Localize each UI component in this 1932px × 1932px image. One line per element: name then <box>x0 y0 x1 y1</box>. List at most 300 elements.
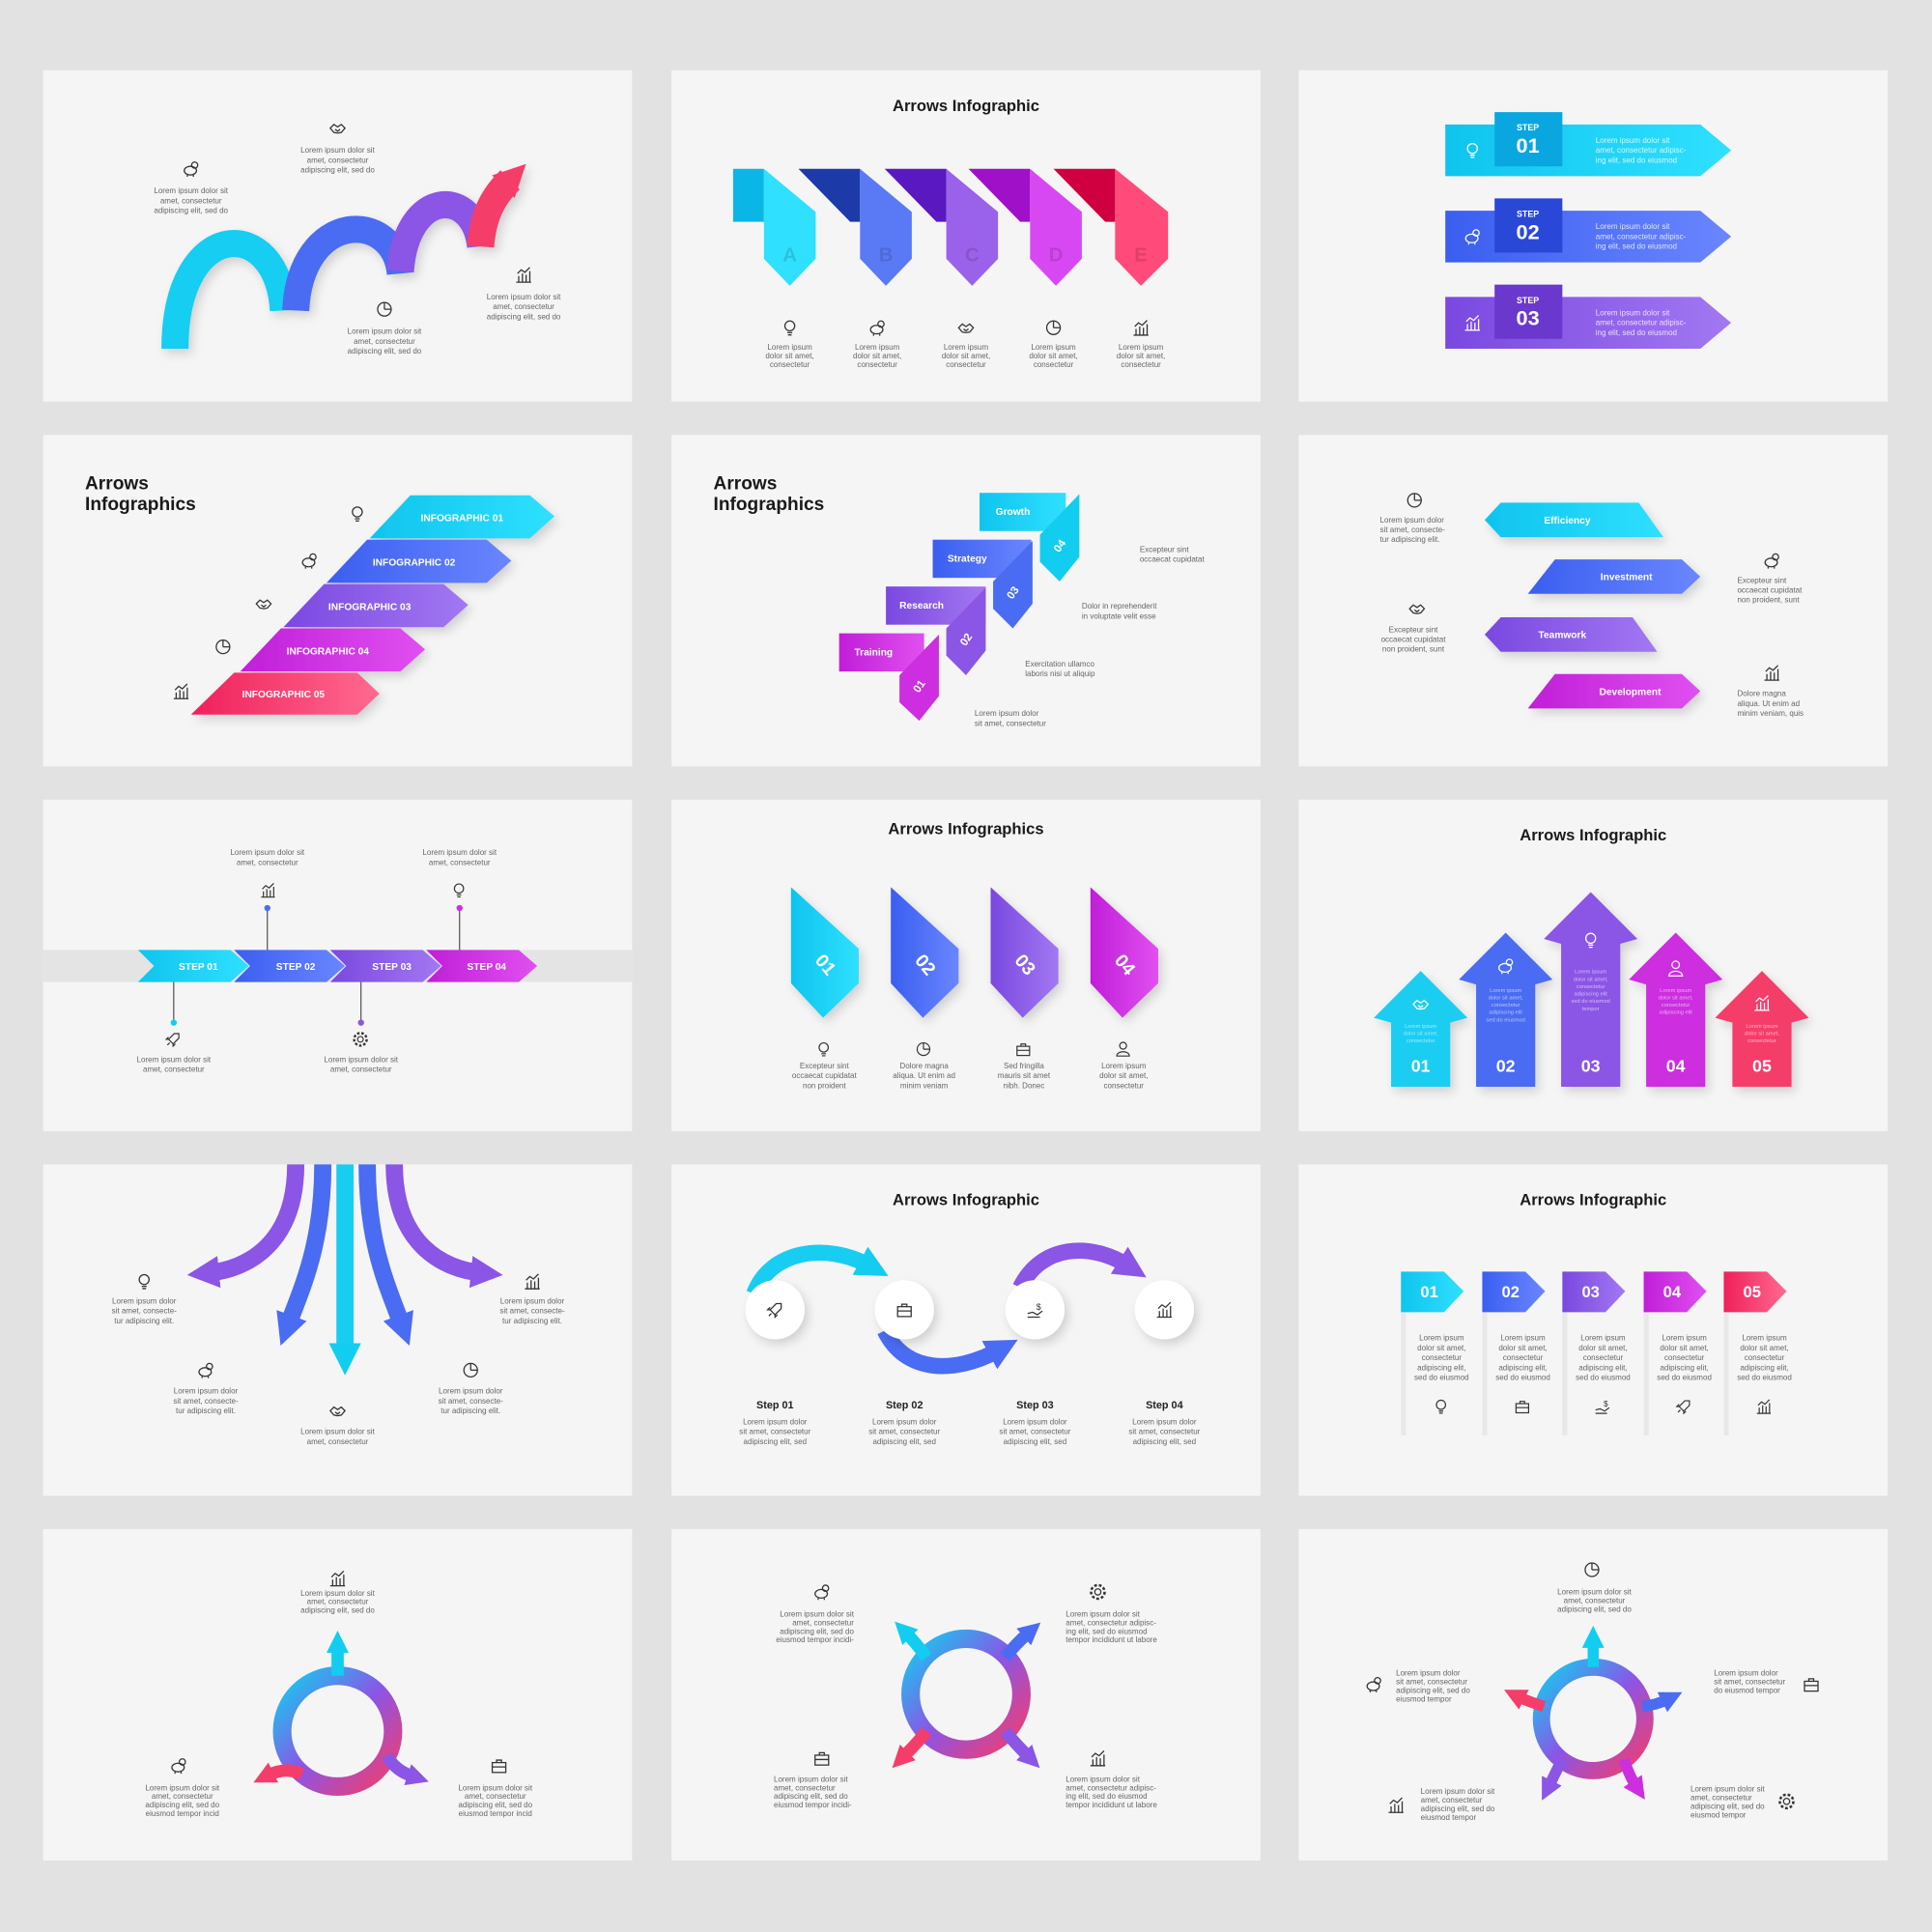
step 03: amet, consectetur adipisc- <box>1596 319 1687 327</box>
pin icons and texts: amet, consectetur <box>237 858 298 867</box>
icons and captions: occaecat cupidatat <box>792 1071 858 1080</box>
ribbons: A <box>782 244 797 266</box>
text: item 3: amet, consectetur <box>354 337 415 346</box>
step captions: Step 01 <box>756 1400 794 1411</box>
small texts: consectetur <box>1747 1038 1776 1044</box>
icons and captions: dolor sit amet, <box>1117 352 1165 360</box>
icon: piggy <box>185 162 198 177</box>
texts: adipiscing elit, sed do <box>1421 1804 1495 1813</box>
texts: adipiscing elit, sed do <box>458 1801 533 1809</box>
side texts: occaecat cupidatat <box>1381 636 1446 644</box>
step 02: amet, consectetur adipisc- <box>1596 232 1687 241</box>
small texts: sed do eiusmod <box>1486 1017 1525 1023</box>
texts: adipiscing elit, sed do <box>1557 1605 1632 1613</box>
texts: Lorem ipsum dolor <box>1396 1669 1461 1678</box>
fan texts: sit amet, consecte- <box>112 1307 177 1316</box>
panel: wave steps: adipiscing elit, sed <box>1133 1437 1196 1446</box>
side texts: sit amet, consecte- <box>1380 526 1445 534</box>
column texts: sed do eiusmod <box>1576 1374 1631 1382</box>
column texts: adipiscing elit, <box>1660 1363 1709 1372</box>
step 01: amet, consectetur adipisc- <box>1596 146 1687 155</box>
diagonal arrows: 03 <box>1006 584 1022 602</box>
icons and captions: Lorem ipsum <box>1119 343 1164 352</box>
pins <box>174 908 460 1023</box>
text: item 1: Lorem ipsum dolor sit <box>154 186 229 195</box>
texts: Lorem ipsum dolor sit <box>1065 1775 1141 1783</box>
title: Arrows Infographics <box>888 820 1044 838</box>
icons and captions: Excepteur sint <box>800 1062 849 1070</box>
texts: adipiscing elit, sed do <box>1396 1687 1470 1695</box>
fan texts: tur adipiscing elit. <box>502 1317 562 1325</box>
side texts <box>1380 494 1804 718</box>
column texts: consectetur <box>1745 1353 1785 1362</box>
small texts: consectetur <box>1406 1038 1435 1044</box>
side texts: Excepteur sint <box>1389 625 1438 634</box>
texts: Lorem ipsum dolor sit <box>1557 1588 1633 1597</box>
texts: Lorem ipsum dolor sit <box>1690 1785 1765 1794</box>
icon: pie <box>378 302 391 316</box>
panel: wave steps: adipiscing elit, sed <box>872 1437 936 1446</box>
panel: wave steps: adipiscing elit, sed <box>744 1437 807 1446</box>
title: Infographics <box>85 495 196 515</box>
panel: staircase: sit amet, consectetur <box>975 719 1046 727</box>
column texts: dolor sit amet, <box>1660 1344 1709 1352</box>
title: Arrows <box>85 473 149 494</box>
fan texts <box>112 1274 565 1446</box>
side texts: Dolore magna <box>1737 690 1786 698</box>
step 03: 03 <box>1517 306 1540 330</box>
text: item 2: Lorem ipsum dolor sit <box>300 146 376 155</box>
step 02: 02 <box>1517 219 1540 243</box>
captions: occaecat cupidatat <box>1140 555 1205 564</box>
texts <box>145 1571 533 1818</box>
step boxes: Research <box>899 601 944 611</box>
panel: staircase: Lorem ipsum dolor <box>975 709 1039 718</box>
column texts: Lorem ipsum <box>1662 1334 1707 1343</box>
side texts: Excepteur sint <box>1737 576 1787 584</box>
column heads: 01 <box>1420 1283 1438 1301</box>
text: item 4: adipiscing elit, sed do <box>487 312 561 321</box>
column texts: dolor sit amet, <box>1417 1344 1466 1352</box>
arrows <box>1485 502 1700 708</box>
chevrons: STEP 02 <box>276 962 316 973</box>
arrow labels: Efficiency <box>1544 516 1591 526</box>
icons and captions: consectetur <box>1104 1081 1144 1090</box>
side texts: occaecat cupidatat <box>1737 586 1803 595</box>
title: Arrows Infographic <box>1520 1190 1666 1208</box>
icons and captions: dolor sit amet, <box>1029 352 1078 360</box>
icons and captions: consectetur <box>1034 360 1074 369</box>
icons and captions: dolor sit amet, <box>765 352 814 360</box>
texts: eiusmod tempor <box>1421 1813 1476 1822</box>
texts: amet, consectetur adipisc- <box>1065 1783 1156 1792</box>
column texts: consectetur <box>1583 1353 1623 1362</box>
captions: Excepteur sint <box>1140 545 1189 554</box>
arrow labels: INFOGRAPHIC 04 <box>287 646 369 657</box>
panel: four named arrows <box>1298 435 1888 766</box>
arrows stack <box>191 496 554 715</box>
texts: amet, consectetur <box>1564 1596 1626 1605</box>
column texts: adipiscing elit, <box>1578 1363 1628 1372</box>
panel: wave steps: sit amet, consectetur <box>739 1428 811 1436</box>
icons and captions: Lorem ipsum <box>855 343 900 352</box>
column texts: consectetur <box>1503 1353 1544 1362</box>
text: item 4: Lorem ipsum dolor sit <box>487 293 561 301</box>
ring <box>1542 1667 1645 1771</box>
column texts: adipiscing elit, <box>1498 1363 1548 1372</box>
panel: bridge arches <box>43 71 632 402</box>
panel: four tilted pentagons: 03 <box>1010 951 1038 980</box>
texts: eiusmod tempor incid <box>146 1809 219 1818</box>
pin icons and texts: amet, consectetur <box>143 1065 205 1074</box>
fan texts: Lorem ipsum dolor <box>112 1296 177 1305</box>
panel: three steps <box>1298 71 1888 402</box>
texts <box>1367 1563 1818 1822</box>
icons and captions: nibh. Donec <box>1004 1081 1044 1090</box>
texts: tempor incididunt ut labore <box>1065 1801 1157 1809</box>
column texts <box>1414 1334 1792 1382</box>
panel: wave steps: sit amet, consectetur <box>999 1428 1071 1436</box>
small texts: Lorem ipsum <box>1575 970 1606 976</box>
icons and captions: consectetur <box>857 360 897 369</box>
small texts: sed do eiusmod <box>1571 999 1610 1005</box>
texts: amet, consectetur <box>1690 1794 1752 1803</box>
pin icons and texts: Lorem ipsum dolor sit <box>137 1055 212 1064</box>
step 01: ing elit, sed do eiusmod <box>1596 156 1677 164</box>
icons and captions: consectetur <box>1121 360 1161 369</box>
column shadows <box>1401 1312 1729 1435</box>
small texts: tempor <box>1582 1007 1600 1012</box>
texts: amet, consectetur <box>774 1783 836 1792</box>
icons and captions: Sed fringilla <box>1004 1062 1044 1070</box>
small texts: Lorem ipsum <box>1490 988 1521 994</box>
column icons <box>1436 1399 1771 1413</box>
texts: eiusmod tempor <box>1396 1694 1452 1703</box>
numbers <box>1411 1057 1772 1076</box>
panel: staircase: in voluptate velit esse <box>1082 611 1156 620</box>
ring arrows <box>1518 1641 1668 1786</box>
panel: four tilted pentagons <box>671 800 1261 1131</box>
panel: four tilted pentagons: 04 <box>1110 951 1139 980</box>
texts: Lorem ipsum dolor sit <box>780 1609 855 1618</box>
icons and captions <box>765 321 1165 369</box>
icons and captions: dolor sit amet, <box>853 352 901 360</box>
fan texts: sit amet, consecte- <box>173 1397 239 1406</box>
chevrons: STEP 04 <box>468 962 506 973</box>
texts: Lorem ipsum dolor <box>1714 1669 1778 1678</box>
numbers: 05 <box>1752 1057 1772 1076</box>
icons and captions: Lorem ipsum <box>1101 1062 1147 1070</box>
step captions: Step 03 <box>1016 1400 1054 1411</box>
texts: ing elit, sed do eiusmod <box>1065 1792 1148 1801</box>
step captions: Step 02 <box>886 1400 923 1411</box>
pin icons and texts: Lorem ipsum dolor sit <box>324 1055 399 1064</box>
small texts: Lorem ipsum <box>1660 988 1691 994</box>
column texts: dolor sit amet, <box>1498 1344 1548 1352</box>
icons and captions: non proident <box>803 1081 846 1090</box>
texts: eiusmod tempor incidi- <box>776 1635 854 1644</box>
text: item 2: adipiscing elit, sed do <box>300 166 375 175</box>
title: Arrows <box>714 473 777 494</box>
column texts: Lorem ipsum <box>1419 1334 1464 1343</box>
icons and captions: dolor sit amet, <box>942 352 990 360</box>
small texts: dolor sit amet, <box>1489 995 1523 1001</box>
panel: wave steps: Lorem ipsum dolor <box>1003 1417 1067 1426</box>
pin icons and texts <box>137 848 497 1074</box>
text: item 4: amet, consectetur <box>493 302 554 311</box>
column texts: adipiscing elit, <box>1740 1363 1789 1372</box>
ribbons: C <box>965 244 980 266</box>
step 03: STEP <box>1517 296 1539 305</box>
texts: sit amet, consectetur <box>1396 1678 1467 1687</box>
ribbons <box>733 169 1168 286</box>
small texts: Lorem ipsum <box>1405 1024 1436 1030</box>
column texts: Lorem ipsum <box>1500 1334 1546 1343</box>
column heads: 03 <box>1581 1283 1600 1301</box>
texts: Lorem ipsum dolor sit <box>300 1589 376 1598</box>
texts <box>774 1585 1157 1809</box>
step boxes: Training <box>855 648 893 659</box>
numbers: 03 <box>1581 1057 1601 1076</box>
column heads <box>1401 1271 1786 1312</box>
arrow labels <box>242 514 503 700</box>
step boxes: Growth <box>996 507 1030 518</box>
side texts: tur adipiscing elit. <box>1380 535 1440 544</box>
texts: amet, consectetur adipisc- <box>1065 1618 1156 1627</box>
step 02 <box>1445 198 1731 263</box>
panel: wave steps: sit amet, consectetur <box>1128 1428 1201 1436</box>
icons <box>174 507 362 698</box>
texts: Lorem ipsum dolor sit <box>145 1783 220 1792</box>
arrow labels <box>1539 516 1662 697</box>
arches <box>175 180 510 349</box>
texts: adipiscing elit, sed do <box>1690 1802 1765 1810</box>
column texts: sed do eiusmod <box>1657 1374 1712 1382</box>
icons and captions: consectetur <box>770 360 810 369</box>
icons <box>1413 933 1770 1010</box>
texts: Lorem ipsum dolor sit <box>1421 1787 1495 1796</box>
small texts: consectetur <box>1492 1003 1520 1009</box>
column texts: adipiscing elit, <box>1417 1363 1466 1372</box>
column texts: consectetur <box>1422 1353 1462 1362</box>
arrow labels: Development <box>1600 687 1662 697</box>
ring <box>911 1638 1021 1749</box>
text: item 2: amet, consectetur <box>307 156 369 164</box>
diagonal arrows <box>899 494 1079 721</box>
panel: step timeline <box>43 800 632 1131</box>
small texts: dolor sit amet, <box>1404 1031 1438 1037</box>
texts: amet, consectetur <box>465 1792 526 1801</box>
icon: hand <box>330 125 345 133</box>
ribbons: E <box>1134 244 1148 266</box>
panel: staircase <box>671 435 1261 766</box>
column texts: Lorem ipsum <box>1742 1334 1787 1343</box>
icon: chart <box>516 268 531 282</box>
panel: staircase: laboris nisi ut aliquip <box>1025 669 1095 678</box>
column texts: sed do eiusmod <box>1495 1374 1550 1382</box>
pentagons <box>791 887 1158 1018</box>
texts: eiusmod tempor <box>1690 1810 1747 1819</box>
panel: wave steps: Lorem ipsum dolor <box>743 1417 808 1426</box>
step boxes <box>839 493 1065 671</box>
pin icons and texts: Lorem ipsum dolor sit <box>422 848 497 857</box>
small texts: consectetur <box>1662 1003 1690 1009</box>
step captions <box>756 1400 1183 1411</box>
column texts: Lorem ipsum <box>1580 1334 1626 1343</box>
step 03 <box>1445 285 1731 349</box>
texts: eiusmod tempor incid <box>459 1809 532 1818</box>
texts: Lorem ipsum dolor sit <box>458 1783 533 1792</box>
texts: adipiscing elit, sed do <box>780 1627 854 1635</box>
panel: staircase: Exercitation ullamco <box>1025 660 1094 668</box>
panel: ribbon arrows A-E <box>671 71 1261 402</box>
icons and captions: Dolore magna <box>899 1062 949 1070</box>
small texts: dolor sit amet, <box>1745 1031 1779 1037</box>
title: Infographics <box>714 495 824 515</box>
step 03: ing elit, sed do eiusmod <box>1596 328 1677 337</box>
icons and captions: mauris sit amet <box>998 1071 1051 1080</box>
texts: adipiscing elit, sed do <box>145 1801 220 1809</box>
texts: Lorem ipsum dolor sit <box>774 1775 848 1783</box>
chevrons: STEP 03 <box>372 962 412 973</box>
column texts: sed do eiusmod <box>1737 1374 1792 1382</box>
panel: five columns <box>1298 1164 1888 1495</box>
panel: four tilted pentagons: 01 <box>810 951 839 980</box>
side texts: minim veniam, quis <box>1737 709 1804 718</box>
step 01: 01 <box>1517 133 1540 157</box>
fan texts: Lorem ipsum dolor <box>500 1296 565 1305</box>
numbers: 04 <box>1666 1057 1686 1076</box>
ribbons: B <box>879 244 893 266</box>
text: item 3: adipiscing elit, sed do <box>348 347 422 355</box>
column heads: 05 <box>1744 1283 1761 1301</box>
step 02: STEP <box>1517 209 1539 218</box>
arrow labels: Investment <box>1601 573 1653 583</box>
step captions: Step 04 <box>1146 1400 1183 1411</box>
circles with icons <box>746 1280 1194 1339</box>
ring <box>282 1676 393 1786</box>
arrow labels: INFOGRAPHIC 05 <box>242 690 325 700</box>
pin icons and texts: amet, consectetur <box>429 858 491 867</box>
panel: wave steps: adipiscing elit, sed <box>1004 1437 1066 1446</box>
panel: ring five arrows <box>1298 1529 1888 1861</box>
panel: ring three arrows <box>43 1529 632 1861</box>
title: Arrows Infographic <box>893 97 1039 115</box>
column heads: 02 <box>1502 1283 1520 1301</box>
small texts: dolor sit amet, <box>1659 995 1693 1001</box>
diagonal arrows: 04 <box>1052 537 1069 554</box>
icons and captions: Lorem ipsum <box>1031 343 1076 352</box>
fan texts: sit amet, consecte- <box>439 1397 503 1406</box>
column heads: 04 <box>1663 1283 1682 1301</box>
pin icons and texts: amet, consectetur <box>330 1065 392 1074</box>
text: item 3: Lorem ipsum dolor sit <box>348 327 422 336</box>
text: item 1: amet, consectetur <box>160 196 222 205</box>
icons and captions: minim veniam <box>900 1081 949 1090</box>
column texts: dolor sit amet, <box>1578 1344 1628 1352</box>
texts: Lorem ipsum dolor sit <box>1065 1609 1141 1618</box>
texts: amet, consectetur <box>152 1792 213 1801</box>
icons and captions: dolor sit amet, <box>1099 1071 1148 1080</box>
icons and captions: Lorem ipsum <box>944 343 988 352</box>
fan <box>210 1164 480 1353</box>
arrow labels: Teamwork <box>1539 631 1586 641</box>
fan texts: sit amet, consecte- <box>499 1307 565 1316</box>
title: Arrows Infographic <box>893 1190 1039 1208</box>
small texts: adipiscing elit <box>1575 992 1607 998</box>
fan texts: Lorem ipsum dolor <box>174 1387 239 1396</box>
fan texts: amet, consectetur <box>307 1437 369 1446</box>
arrow labels: INFOGRAPHIC 02 <box>373 557 456 568</box>
side texts: non proident, sunt <box>1382 645 1445 654</box>
panel: wave steps <box>671 1164 1261 1495</box>
fan texts: tur adipiscing elit. <box>114 1317 174 1325</box>
title: Arrows Infographic <box>1520 826 1666 844</box>
diagonal arrows: 01 <box>912 678 928 696</box>
column texts: dolor sit amet, <box>1740 1344 1789 1352</box>
column texts: sed do eiusmod <box>1414 1374 1469 1382</box>
chevrons <box>138 950 537 982</box>
step 01: Lorem ipsum dolor sit <box>1596 136 1670 145</box>
texts: amet, consectetur <box>307 1598 369 1606</box>
arrow labels: INFOGRAPHIC 03 <box>328 602 412 612</box>
diagonal arrows: 02 <box>958 632 975 648</box>
icons and captions: Lorem ipsum <box>767 343 812 352</box>
fan texts: Lorem ipsum dolor sit <box>300 1428 376 1436</box>
panel: stacked infographic arrows <box>43 435 632 766</box>
text: item 1: adipiscing elit, sed do <box>154 207 229 215</box>
panel: wave steps: Lorem ipsum dolor <box>872 1417 937 1426</box>
texts: ing elit, sed do eiusmod <box>1065 1627 1148 1635</box>
step 03: Lorem ipsum dolor sit <box>1596 309 1670 318</box>
small texts <box>1404 970 1779 1044</box>
panel: wave steps: sit amet, consectetur <box>868 1428 941 1436</box>
icons and captions: consectetur <box>946 360 986 369</box>
numbers: 02 <box>1496 1057 1516 1076</box>
side texts: non proident, sunt <box>1737 596 1800 605</box>
ring arrows <box>903 1633 1029 1757</box>
curved arrows <box>754 1251 1127 1366</box>
step 02: Lorem ipsum dolor sit <box>1596 222 1670 231</box>
texts: sit amet, consectetur <box>1714 1678 1786 1687</box>
panel: fan arrows <box>43 1164 632 1495</box>
chevrons: STEP 01 <box>179 962 218 973</box>
small texts: dolor sit amet, <box>1574 977 1608 982</box>
fan texts: tur adipiscing elit. <box>440 1406 500 1415</box>
column texts: consectetur <box>1664 1353 1705 1362</box>
texts: amet, consectetur <box>792 1618 854 1627</box>
numbers: 01 <box>1411 1057 1431 1076</box>
small texts: consectetur <box>1577 984 1605 990</box>
texts: do eiusmod tempor <box>1714 1687 1780 1695</box>
step 01: STEP <box>1517 123 1539 132</box>
up arrows <box>1374 892 1808 1087</box>
ribbons: D <box>1049 244 1063 266</box>
small texts: adipiscing elit <box>1490 1010 1522 1016</box>
step 01 <box>1445 112 1731 176</box>
fan texts: tur adipiscing elit. <box>176 1406 236 1415</box>
icons and captions <box>792 1042 1148 1090</box>
icons and captions: aliqua. Ut enim ad <box>893 1071 955 1080</box>
panel: staircase: Dolor in reprehenderit <box>1082 602 1157 611</box>
side texts: aliqua. Ut enim ad <box>1737 699 1800 708</box>
arrow labels: INFOGRAPHIC 01 <box>421 514 503 525</box>
step 02: ing elit, sed do eiusmod <box>1596 242 1677 251</box>
texts: eiusmod tempor incidi- <box>774 1801 852 1809</box>
texts: adipiscing elit, sed do <box>300 1606 375 1615</box>
pin icons and texts: Lorem ipsum dolor sit <box>230 848 305 857</box>
small texts: Lorem ipsum <box>1746 1024 1778 1030</box>
